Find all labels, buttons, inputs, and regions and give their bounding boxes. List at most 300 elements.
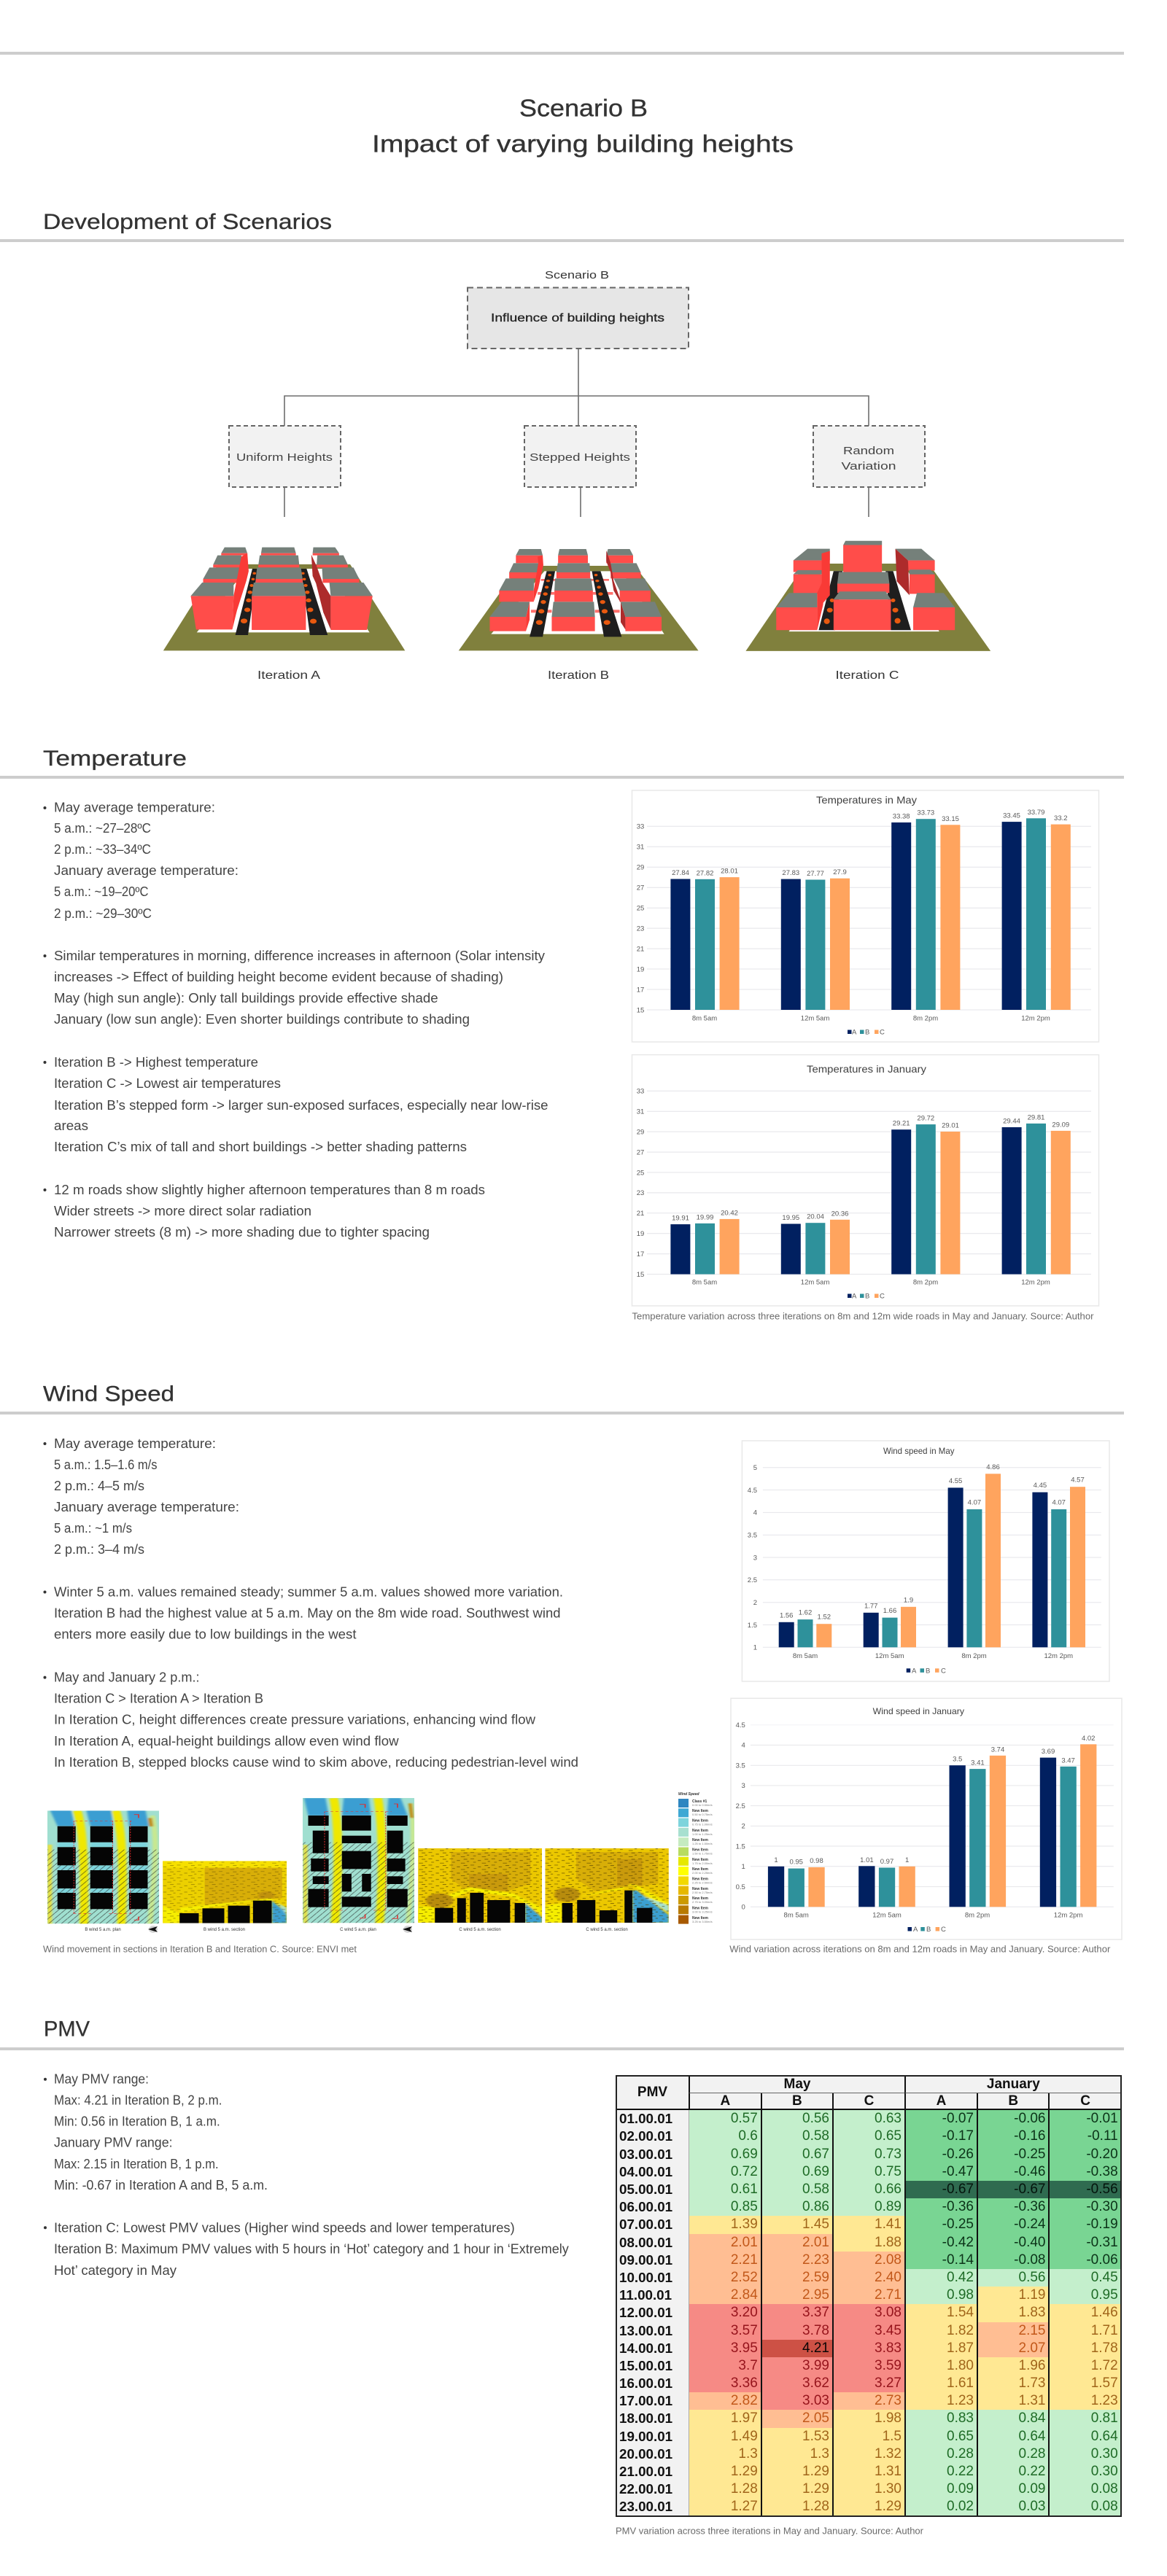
chart: Temperatures in May: 23 xyxy=(637,925,644,933)
text block: temperature findings: increases -> Effect of building height become evident because of shading) xyxy=(54,970,503,984)
text block: wind findings: Winter 5 a.m. values remained steady; summer 5 a.m. values showed more variation. xyxy=(54,1585,563,1600)
text block: temperature findings: Wider streets -> more direct solar radiation xyxy=(54,1204,311,1218)
table: PMV values by hour, iteration and month: 03.00.01 xyxy=(619,2147,672,2162)
table: PMV values by hour, iteration and month: -0.19 xyxy=(1086,2217,1118,2232)
text block: PMV findings: Min: 0.56 in Iteration B, 1 a.m. xyxy=(54,2114,220,2128)
chart: Temperatures in May: C xyxy=(880,1028,885,1037)
table: PMV values by hour, iteration and month: 2.07 xyxy=(1018,2340,1045,2356)
table: PMV values by hour, iteration and month: -0.06 xyxy=(1086,2252,1118,2268)
table: PMV values by hour, iteration and month: A xyxy=(721,2093,730,2109)
text block: temperature findings: Iteration C’s mix of tall and short buildings -> better shading patterns xyxy=(54,1140,467,1154)
table: PMV values by hour, iteration and month: 0.08 xyxy=(1091,2499,1118,2514)
chart: Temperatures in January: 8m 2pm xyxy=(913,1279,938,1286)
table: PMV values by hour, iteration and month: 0.65 xyxy=(947,2429,974,2444)
chart: Wind speed in January: 8m 5am xyxy=(784,1912,809,1920)
chart: Wind speed in May: 1 xyxy=(753,1644,757,1652)
table: PMV values by hour, iteration and month: 0.09 xyxy=(1018,2481,1045,2497)
table: PMV values by hour, iteration and month: 0.73 xyxy=(875,2147,902,2162)
legend: wind speed classes: New Item xyxy=(692,1906,709,1910)
table: PMV values by hour, iteration and month: 4.21 xyxy=(802,2340,829,2356)
table: PMV values by hour, iteration and month: 3.08 xyxy=(875,2305,902,2320)
table: PMV values by hour, iteration and month: 2.40 xyxy=(875,2270,902,2285)
legend: wind speed classes: New Item xyxy=(692,1916,709,1921)
table: PMV values by hour, iteration and month: 1.3 xyxy=(810,2446,829,2462)
table: PMV values by hour, iteration and month: 1.72 xyxy=(1091,2358,1118,2373)
heading: Wind Speed: Wind Speed xyxy=(43,1382,174,1406)
legend: wind speed classes: 2.75 to 3.00m/s xyxy=(692,1900,713,1904)
table: PMV values by hour, iteration and month: 05.00.01 xyxy=(619,2182,672,2197)
table: PMV values by hour, iteration and month: 2.95 xyxy=(802,2287,829,2303)
chart: Wind speed in May: 4.07 xyxy=(968,1499,981,1506)
chart: Temperatures in May: 21 xyxy=(637,945,644,954)
chart: Temperatures in May: B xyxy=(865,1028,869,1037)
table: PMV values by hour, iteration and month: 2.84 xyxy=(731,2287,758,2303)
column header: PMV xyxy=(616,2076,689,2110)
legend: wind speed classes xyxy=(678,1792,713,1924)
table: PMV values by hour, iteration and month: 1.28 xyxy=(731,2481,758,2497)
chart: Wind speed in January: 3.5 xyxy=(736,1762,745,1770)
table: PMV values by hour, iteration and month: 0.64 xyxy=(1018,2429,1045,2444)
table: PMV values by hour, iteration and month: 1.5 xyxy=(883,2429,902,2444)
table: PMV values by hour, iteration and month: -0.46 xyxy=(1014,2164,1045,2179)
chart: Temperatures in January xyxy=(632,1055,1098,1306)
chart: Temperatures in May: 33.45 xyxy=(1003,812,1020,820)
table: PMV values by hour, iteration and month: 0.02 xyxy=(947,2499,974,2514)
chart: Temperatures in January: 19.91 xyxy=(672,1215,689,1223)
table: PMV values by hour, iteration and month: -0.11 xyxy=(1087,2128,1118,2144)
chart: Temperatures in January: 19.99 xyxy=(697,1213,713,1221)
box: Random Variation xyxy=(813,426,925,487)
table: PMV values by hour, iteration and month: -0.25 xyxy=(942,2217,974,2232)
table: PMV values by hour, iteration and month: 1.87 xyxy=(947,2340,974,2356)
text block: PMV findings: May PMV range: xyxy=(54,2072,149,2087)
chart: Temperatures in May: 29 xyxy=(637,863,644,872)
table: PMV values by hour, iteration and month: 3.20 xyxy=(731,2305,758,2320)
legend: wind speed classes: New Item xyxy=(692,1867,709,1872)
chart: Temperatures in May: 31 xyxy=(637,843,644,852)
chart: Wind speed in January: 8m 2pm xyxy=(965,1912,990,1920)
table: PMV values by hour, iteration and month: 1.27 xyxy=(731,2499,758,2514)
chart: Temperatures in January: 29.81 xyxy=(1028,1113,1044,1121)
table: PMV values by hour, iteration and month: 0.65 xyxy=(875,2128,902,2144)
title xyxy=(372,95,794,157)
chart: Temperatures in May: 8m 2pm xyxy=(913,1015,938,1022)
table: PMV values by hour, iteration and month: 0.69 xyxy=(802,2164,829,2179)
table: PMV values by hour, iteration and month: 1.83 xyxy=(1018,2305,1045,2320)
chart: Temperatures in January: 29.44 xyxy=(1003,1117,1020,1126)
table: PMV values by hour, iteration and month: 20.00.01 xyxy=(619,2446,672,2462)
text block: wind findings: May average temperature: xyxy=(54,1436,216,1451)
chart: Wind speed in January: 0.95 xyxy=(789,1858,803,1866)
table: PMV values by hour, iteration and month: 1.54 xyxy=(947,2305,974,2320)
chart: Wind speed in May: 1.66 xyxy=(883,1607,896,1615)
table: PMV values by hour, iteration and month: 1.28 xyxy=(802,2499,829,2514)
table: PMV values by hour, iteration and month: 0.72 xyxy=(731,2164,758,2179)
table: PMV values by hour, iteration and month: 1.23 xyxy=(1091,2393,1118,2408)
chart: Temperatures in January: 27 xyxy=(637,1149,644,1156)
column header: PMV: PMV xyxy=(637,2085,667,2100)
chart: Temperatures in January: 25 xyxy=(637,1170,644,1177)
text block: temperature findings: May average temperature: xyxy=(54,801,215,815)
chart: Wind speed in January: 2.5 xyxy=(736,1802,745,1810)
table: PMV values by hour, iteration and month: 0.57 xyxy=(731,2111,758,2126)
chart: Temperatures in January: B xyxy=(865,1292,869,1301)
legend: wind speed classes: Wind Speed xyxy=(678,1792,700,1797)
chart: Temperatures in May: 33.2 xyxy=(1054,814,1068,822)
chart: Wind speed in May: C xyxy=(941,1667,946,1676)
chart: Temperatures in May: 17 xyxy=(637,986,644,995)
chart: Temperatures in May: 27.77 xyxy=(807,870,824,878)
table: PMV values by hour, iteration and month: 1.39 xyxy=(731,2217,758,2232)
caption: PMV table: PMV variation across three iterations in May and January. Source: Author xyxy=(616,2526,924,2536)
table: PMV values by hour, iteration and month: -0.17 xyxy=(942,2128,974,2144)
chart: Temperatures in May: 28.01 xyxy=(721,868,738,876)
table: PMV values by hour, iteration and month: 0.84 xyxy=(1018,2410,1045,2426)
chart: Temperatures in January: 21 xyxy=(637,1210,644,1218)
chart: Temperatures in January: 20.42 xyxy=(721,1209,738,1217)
chart: Wind speed in May: 1.56 xyxy=(780,1611,793,1619)
map: B wind plan xyxy=(47,1810,159,1927)
chart: Temperatures in January: 12m 2pm xyxy=(1021,1279,1050,1286)
chart: Wind speed in January: 3.74 xyxy=(991,1746,1004,1754)
table: PMV values by hour, iteration and month: 23.00.01 xyxy=(619,2499,672,2514)
table: PMV values by hour, iteration and month: 09.00.01 xyxy=(619,2252,672,2268)
text block: temperature findings: 12 m roads show slightly higher afternoon temperatures than 8 m roads xyxy=(54,1183,485,1197)
column header: January: January xyxy=(987,2077,1040,2092)
chart: Wind speed in January: 1 xyxy=(905,1856,909,1864)
chart: Temperatures in January: 20.04 xyxy=(807,1213,824,1221)
heading: PMV: PMV xyxy=(44,2017,90,2042)
table: PMV values by hour, iteration and month: -0.31 xyxy=(1086,2235,1118,2250)
table: PMV values by hour, iteration and month: 0.83 xyxy=(947,2410,974,2426)
legend: wind speed classes: New Item xyxy=(692,1858,709,1862)
chart: Wind speed in May: 1.62 xyxy=(799,1609,812,1617)
table: PMV values by hour, iteration and month: 1.73 xyxy=(1018,2375,1045,2391)
table: PMV values by hour, iteration and month: 0.75 xyxy=(875,2164,902,2179)
chart: Wind speed in May: 4.45 xyxy=(1034,1482,1047,1490)
text block: wind findings: Iteration B had the highest value at 5 a.m. May on the 8m wide road. Southwest wind xyxy=(54,1606,560,1621)
chart: Temperatures in May: 8m 5am xyxy=(692,1015,717,1022)
table: PMV values by hour, iteration and month: -0.56 xyxy=(1086,2182,1118,2197)
text block: wind findings: Iteration C > Iteration A > Iteration B xyxy=(54,1692,263,1706)
table: PMV values by hour, iteration and month: 1.19 xyxy=(1018,2287,1045,2303)
table: PMV values by hour, iteration and month: 01.00.01 xyxy=(619,2111,672,2126)
illustration: Iteration C massing xyxy=(745,541,990,651)
text block: PMV findings: January PMV range: xyxy=(54,2136,173,2150)
text block: wind findings: In Iteration A, equal-height buildings allow even wind flow xyxy=(54,1734,400,1748)
title: Impact of varying building heights xyxy=(372,130,794,157)
legend: wind speed classes: 1.50 to 1.75m/s xyxy=(692,1852,713,1855)
table: PMV values by hour, iteration and month: 11.00.01 xyxy=(619,2287,672,2303)
table: PMV values by hour, iteration and month: 1.30 xyxy=(875,2481,902,2497)
chart: Wind speed in May: 12m 5am xyxy=(875,1652,904,1660)
chart: Wind speed in January: 3.41 xyxy=(971,1759,985,1767)
text block: temperature findings: January average temperature: xyxy=(54,863,239,878)
chart: Wind speed in May: 3 xyxy=(753,1554,757,1562)
table: PMV values by hour, iteration and month: 2.01 xyxy=(802,2235,829,2250)
table: PMV values by hour, iteration and month: 08.00.01 xyxy=(619,2235,672,2250)
legend: wind speed classes: New Item xyxy=(692,1848,709,1852)
legend: wind speed classes: 2.00 to 2.25m/s xyxy=(692,1871,713,1875)
legend: wind speed classes: New Item xyxy=(692,1896,709,1901)
chart: Wind speed in May: 4.07 xyxy=(1052,1499,1066,1506)
chart: Wind speed in January: 12m 2pm xyxy=(1054,1912,1082,1920)
legend: wind speed classes: New Item xyxy=(692,1818,709,1823)
map: C wind section 2 xyxy=(546,1848,669,1923)
legend: wind speed classes: 0.75 to 1.00m/s xyxy=(692,1823,713,1826)
chart: Wind speed in May: 3.5 xyxy=(748,1531,757,1540)
table: PMV values by hour, iteration and month: 3.78 xyxy=(802,2323,829,2338)
chart: Temperatures in January: C xyxy=(880,1292,885,1301)
map captions and north arrows: C wind 5 a.m. section xyxy=(586,1928,628,1932)
panel: scenario tree diagram xyxy=(229,270,925,517)
chart: Wind speed in May: B xyxy=(926,1667,930,1676)
legend: wind speed classes: 1.75 to 2.00m/s xyxy=(692,1861,713,1865)
chart: Temperatures in May: 25 xyxy=(637,904,644,913)
table: PMV values by hour, iteration and month: B xyxy=(1008,2093,1018,2109)
text block: PMV findings: Iteration C: Lowest PMV values (Higher wind speeds and lower temperatures) xyxy=(54,2220,515,2235)
chart: Wind speed in January: 0.5 xyxy=(736,1883,745,1891)
table: PMV values by hour, iteration and month: C xyxy=(864,2093,874,2109)
label: Iteration C: Iteration C xyxy=(836,669,899,682)
table: PMV values by hour, iteration and month: 0.64 xyxy=(1091,2429,1118,2444)
chart: Temperatures in January: A xyxy=(852,1292,857,1301)
table: PMV values by hour, iteration and month: 0.58 xyxy=(802,2128,829,2144)
map captions and north arrows: B wind 5 a.m. section xyxy=(203,1928,245,1932)
map: C wind section 1 xyxy=(418,1848,542,1923)
table: PMV values by hour, iteration and month: 3.62 xyxy=(802,2375,829,2391)
box: Stepped Heights: Stepped Heights xyxy=(530,451,630,464)
chart: Temperatures in May: 33.79 xyxy=(1028,809,1044,817)
text block: temperature findings xyxy=(44,801,548,1240)
table: PMV values by hour, iteration and month: -0.07 xyxy=(942,2111,974,2126)
chart: Wind speed in January: 3.47 xyxy=(1061,1756,1075,1764)
table: PMV values by hour, iteration and month: 1.82 xyxy=(947,2323,974,2338)
column header: May: May xyxy=(783,2077,810,2092)
legend: wind speed classes: 1.25 to 1.50m/s xyxy=(692,1842,713,1845)
table: PMV values by hour, iteration and month: 0.98 xyxy=(947,2287,974,2303)
table: PMV values by hour, iteration and month: 2.05 xyxy=(802,2410,829,2426)
table: PMV values by hour, iteration and month: 19.00.01 xyxy=(619,2429,672,2444)
table: PMV values by hour, iteration and month: 0.81 xyxy=(1091,2410,1118,2426)
text block: temperature findings: Iteration B -> Highest temperature xyxy=(54,1055,258,1070)
chart: Wind speed in May: 4.57 xyxy=(1071,1476,1085,1484)
table: PMV values by hour, iteration and month: 07.00.01 xyxy=(619,2217,672,2232)
chart: Wind speed in January: B xyxy=(926,1926,931,1934)
box: Influence of building heights: Influence of building heights xyxy=(491,312,664,324)
chart: Temperatures in May: 33.73 xyxy=(917,809,934,817)
table: PMV values by hour, iteration and month: 1.78 xyxy=(1091,2340,1118,2356)
table: PMV values by hour, iteration and month: 0.58 xyxy=(802,2182,829,2197)
column header: May xyxy=(689,2076,904,2093)
legend: wind speed classes: Class #1 xyxy=(692,1799,707,1804)
table: PMV values by hour, iteration and month: 0.67 xyxy=(802,2147,829,2162)
chart: Wind speed in May xyxy=(742,1441,1109,1681)
table: PMV values by hour, iteration and month: 0.63 xyxy=(875,2111,902,2126)
figure: ENVI-met wind simulations xyxy=(47,1798,669,1927)
chart: Temperatures in January: 31 xyxy=(637,1108,644,1116)
chart: Wind speed in January: 1 xyxy=(774,1856,778,1864)
table: PMV values by hour, iteration and month: 3.95 xyxy=(731,2340,758,2356)
chart: Wind speed in May: A xyxy=(912,1667,917,1676)
table: PMV values by hour, iteration and month: -0.08 xyxy=(1014,2252,1045,2268)
chart: Temperatures in January: 12m 5am xyxy=(801,1279,829,1286)
text block: PMV findings xyxy=(44,2072,569,2278)
table: PMV values by hour, iteration and month: 0.69 xyxy=(731,2147,758,2162)
legend: wind speed classes: 2.50 to 2.75m/s xyxy=(692,1891,713,1894)
text block: temperature findings: Iteration B’s stepped form -> larger sun-exposed surfaces, especially near low-rise xyxy=(54,1098,548,1113)
table: PMV values by hour, iteration and month: -0.25 xyxy=(1014,2147,1045,2162)
chart: Temperatures in January: Temperatures in January xyxy=(807,1063,926,1075)
chart: Wind speed in May: 5 xyxy=(753,1464,757,1472)
table: PMV values by hour, iteration and month: 0.22 xyxy=(947,2464,974,2479)
table: PMV values by hour, iteration and month: -0.36 xyxy=(1014,2199,1045,2214)
column header: January xyxy=(904,2076,1121,2093)
table: PMV values by hour, iteration and month: 1.29 xyxy=(802,2464,829,2479)
table: PMV values by hour, iteration and month: 0.56 xyxy=(1018,2270,1045,2285)
table: PMV values by hour, iteration and month: 2.71 xyxy=(875,2287,902,2303)
table: PMV values by hour, iteration and month: 1.98 xyxy=(875,2410,902,2426)
table: PMV values by hour, iteration and month: -0.38 xyxy=(1086,2164,1118,2179)
table: PMV values by hour, iteration and month: -0.42 xyxy=(942,2235,974,2250)
table: PMV values by hour, iteration and month: 1.41 xyxy=(875,2217,902,2232)
chart: Wind speed in January xyxy=(731,1698,1122,1939)
chart: Wind speed in January: 0 xyxy=(742,1904,745,1912)
chart: Wind speed in January: 3.69 xyxy=(1042,1748,1055,1756)
table: PMV values by hour, iteration and month: 0.28 xyxy=(1018,2446,1045,2462)
table: PMV values by hour, iteration and month: 1.61 xyxy=(947,2375,974,2391)
table: PMV values by hour, iteration and month: 1.3 xyxy=(738,2446,758,2462)
chart: Wind speed in January: 4.02 xyxy=(1082,1735,1095,1743)
text block: temperature findings: May (high sun angle): Only tall buildings provide effective shade xyxy=(54,991,438,1005)
text block: wind findings: 2 p.m.: 4–5 m/s xyxy=(54,1479,144,1493)
text block: wind findings: enters more easily due to low buildings in the west xyxy=(54,1627,356,1642)
table: PMV values by hour, iteration and month: 1.97 xyxy=(731,2410,758,2426)
text block: wind findings: 5 a.m.: 1.5–1.6 m/s xyxy=(54,1458,158,1472)
table: PMV values by hour, iteration and month: 2.52 xyxy=(731,2270,758,2285)
chart: Temperatures in May: 33.38 xyxy=(893,812,910,821)
table: PMV values by hour, iteration and month: -0.47 xyxy=(942,2164,974,2179)
table: PMV values by hour, iteration and month: 2.82 xyxy=(731,2393,758,2408)
chart: Temperatures in January: 19.95 xyxy=(782,1214,799,1222)
legend: wind speed classes: 3.00 to 3.25m/s xyxy=(692,1910,713,1913)
chart: Wind speed in January: A xyxy=(913,1926,918,1934)
map captions and north arrows: B wind 5 a.m. plan xyxy=(85,1928,121,1932)
text block: PMV findings: Hot’ category in May xyxy=(54,2263,177,2278)
table: PMV values by hour, iteration and month: 1.29 xyxy=(802,2481,829,2497)
chart: Wind speed in May: 1.5 xyxy=(748,1622,757,1630)
top rule xyxy=(0,52,1124,55)
text block: wind findings: In Iteration B, stepped blocks cause wind to skim above, reducing pedestrian-level wind xyxy=(54,1755,578,1770)
chart: Temperatures in May: Temperatures in May xyxy=(816,794,917,806)
table: PMV values by hour, iteration and month: 16.00.01 xyxy=(619,2375,672,2391)
table: PMV values by hour, iteration and month: -0.24 xyxy=(1014,2217,1045,2232)
chart: Wind speed in May: 1.52 xyxy=(818,1614,831,1622)
chart: Wind speed in May: 2 xyxy=(753,1599,757,1607)
table: PMV values by hour, iteration and month: 1.49 xyxy=(731,2429,758,2444)
chart: Temperatures in May: 27.83 xyxy=(782,869,799,877)
table: PMV values by hour, iteration and month: 3.36 xyxy=(731,2375,758,2391)
table: PMV values by hour, iteration and month: -0.40 xyxy=(1014,2235,1045,2250)
text block: temperature findings: Narrower streets (8 m) -> more shading due to tighter spacing xyxy=(54,1225,430,1240)
chart: Wind speed in May: 8m 2pm xyxy=(961,1652,987,1660)
map: B wind section xyxy=(163,1861,287,1923)
label: Scenario B: Scenario B xyxy=(545,270,609,281)
text block: wind findings: 5 a.m.: ~1 m/s xyxy=(54,1521,132,1536)
box: Random Variation: Variation xyxy=(842,460,896,472)
table: PMV values by hour, iteration and month: -0.14 xyxy=(942,2252,974,2268)
legend: wind speed classes: New Item xyxy=(692,1838,709,1842)
illustration: Iteration B massing xyxy=(459,549,699,650)
table: PMV values by hour, iteration and month: 1.29 xyxy=(731,2464,758,2479)
table: PMV values by hour, iteration and month: 0.22 xyxy=(1018,2464,1045,2479)
table: PMV values by hour, iteration and month: 0.30 xyxy=(1091,2464,1118,2479)
chart: Temperatures in May: A xyxy=(852,1028,857,1037)
illustration: Iteration A massing xyxy=(163,548,405,650)
text block: temperature findings: 2 p.m.: ~33–34ºC xyxy=(54,842,151,857)
table: PMV values by hour, iteration and month: 0.08 xyxy=(1091,2481,1118,2497)
text block: temperature findings: 5 a.m.: ~27–28ºC xyxy=(54,821,151,836)
table: PMV values by hour, iteration and month: 15.00.01 xyxy=(619,2358,672,2373)
table: PMV values by hour, iteration and month: 1.31 xyxy=(1018,2393,1045,2408)
table: PMV values by hour, iteration and month: 02.00.01 xyxy=(619,2128,672,2144)
table: PMV values by hour, iteration and month: 0.09 xyxy=(947,2481,974,2497)
table: PMV values by hour, iteration and month: 1.53 xyxy=(802,2429,829,2444)
table: PMV values by hour, iteration and month: 0.6 xyxy=(738,2128,758,2144)
table: PMV values by hour, iteration and month: 2.15 xyxy=(1018,2323,1045,2338)
chart: Temperatures in May: 12m 2pm xyxy=(1021,1015,1050,1022)
table: PMV values by hour, iteration and month: 10.00.01 xyxy=(619,2270,672,2285)
label: Iteration B: Iteration B xyxy=(548,669,609,682)
caption: ENVI-met figure: Wind movement in sections in Iteration B and Iteration C. Source: ENVI met xyxy=(43,1944,357,1954)
text block: wind findings: January average temperature: xyxy=(54,1500,239,1514)
chart: Temperatures in May: 15 xyxy=(637,1006,644,1015)
chart: Temperatures in May: 33 xyxy=(637,822,644,831)
table: PMV values by hour, iteration and month: C xyxy=(1080,2093,1090,2109)
box: Random Variation: Random xyxy=(843,445,894,457)
table: PMV values by hour, iteration and month: 0.42 xyxy=(947,2270,974,2285)
heading: Temperature: Temperature xyxy=(43,747,187,771)
table: PMV values by hour, iteration and month: 12.00.01 xyxy=(619,2305,672,2320)
caption: temperature charts: Temperature variation across three iterations on 8m and 12m wide roads in May and January. Source: Author xyxy=(632,1311,1094,1321)
map captions and north arrows xyxy=(85,1926,628,1933)
table: PMV values by hour, iteration and month: 3.99 xyxy=(802,2358,829,2373)
chart: Temperatures in January: 17 xyxy=(637,1250,644,1258)
box: Influence of building heights xyxy=(468,287,689,349)
chart: Wind speed in January: 1 xyxy=(742,1863,745,1871)
chart: Wind speed in January: 4 xyxy=(742,1742,745,1750)
text block: temperature findings: January (low sun angle): Even shorter buildings contribute to shading xyxy=(54,1012,470,1027)
text block: temperature findings: areas xyxy=(54,1118,88,1133)
chart: Temperatures in January: 33 xyxy=(637,1088,644,1095)
table: PMV values by hour, iteration and month: 06.00.01 xyxy=(619,2199,672,2214)
text block: PMV findings: Max: 2.15 in Iteration B, 1 p.m. xyxy=(54,2157,219,2171)
table: PMV values by hour, iteration and month: 18.00.01 xyxy=(619,2410,672,2426)
table: PMV values by hour, iteration and month: 13.00.01 xyxy=(619,2323,672,2338)
table: PMV values by hour, iteration and month: -0.01 xyxy=(1086,2111,1118,2126)
table: PMV values by hour, iteration and month: 3.57 xyxy=(731,2323,758,2338)
table: PMV values by hour, iteration and month: -0.16 xyxy=(1014,2128,1045,2144)
table: PMV values by hour, iteration and month: 0.95 xyxy=(1091,2287,1118,2303)
table: PMV values by hour, iteration and month: 1.45 xyxy=(802,2217,829,2232)
table: PMV values by hour, iteration and month: 3.03 xyxy=(802,2393,829,2408)
table: PMV values by hour, iteration and month: 3.59 xyxy=(875,2358,902,2373)
table: PMV values by hour, iteration and month: 0.61 xyxy=(731,2182,758,2197)
table: PMV values by hour, iteration and month: 04.00.01 xyxy=(619,2164,672,2179)
legend: wind speed classes: 2.25 to 2.50m/s xyxy=(692,1881,713,1884)
chart: Temperatures in January: 23 xyxy=(637,1189,644,1197)
chart: Wind speed in May: 1.9 xyxy=(904,1596,913,1604)
